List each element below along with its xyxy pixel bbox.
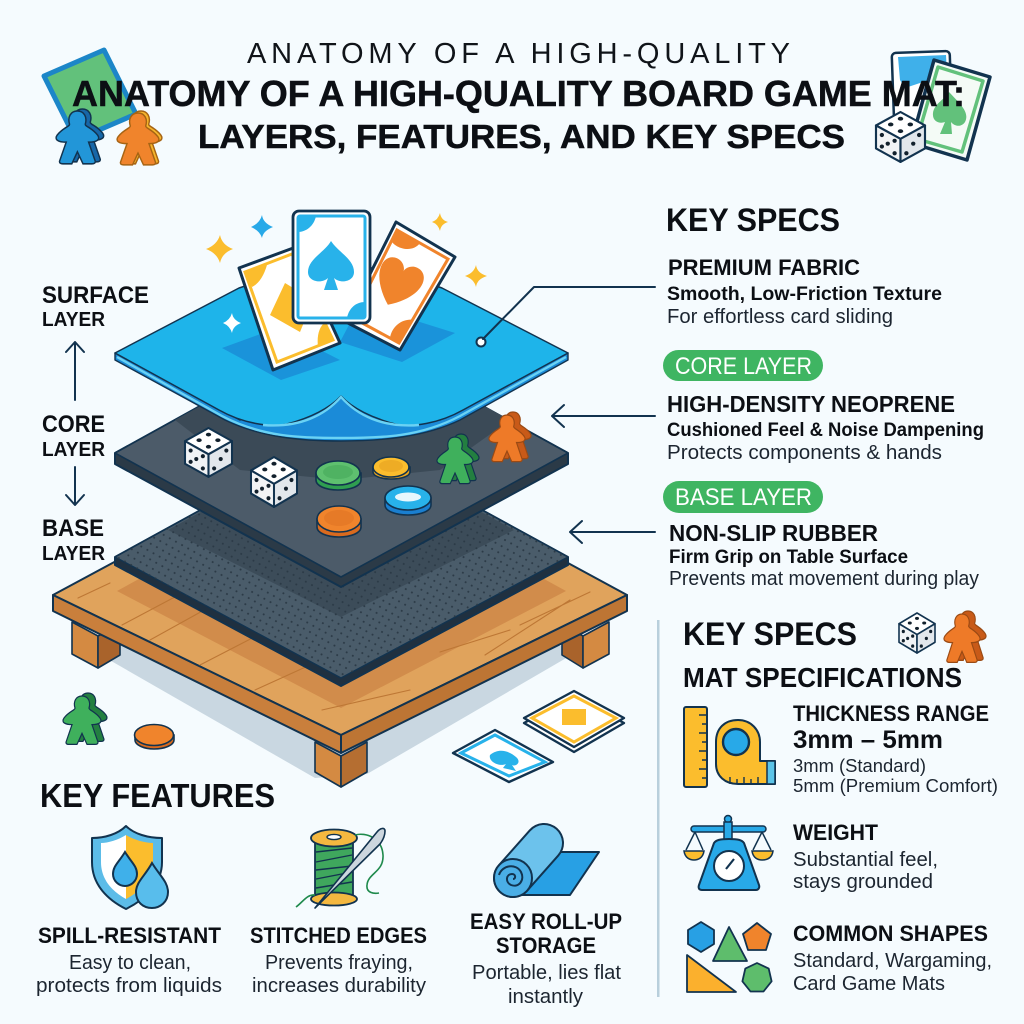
chip: orange — [134, 724, 174, 749]
layer: surface — [115, 268, 568, 441]
icon: dice 2 — [251, 457, 297, 507]
subheading: MAT SPECIFICATIONS — [683, 662, 962, 693]
pill: core layer: CORE LAYER — [675, 353, 812, 380]
base block: Prevents mat movement during play — [669, 568, 979, 590]
left layer labels: LAYER — [42, 543, 106, 565]
thickness text: THICKNESS RANGE — [793, 701, 989, 726]
icon: scale — [684, 816, 773, 890]
header icon: cards and dice — [876, 51, 990, 162]
heading: KEY SPECS — [666, 202, 840, 238]
icon: dice — [899, 613, 935, 653]
blue card — [293, 211, 370, 323]
core block: Protects components & hands — [667, 442, 942, 464]
roll-up text: EASY ROLL-UP — [470, 909, 622, 934]
icon: thread and needle — [296, 828, 385, 908]
card stack: yellow — [524, 691, 624, 752]
table shadow — [92, 600, 580, 778]
left layer labels: BASE — [42, 515, 104, 542]
shapes text: COMMON SHAPES — [793, 921, 988, 946]
roll-up text: instantly — [508, 986, 583, 1008]
title — [72, 38, 965, 155]
meeple: green — [437, 434, 479, 484]
roll-up text — [470, 909, 622, 1008]
meeple: green — [63, 693, 107, 744]
card shadows — [222, 328, 340, 380]
wood grain — [78, 583, 590, 710]
roll-up text: Portable, lies flat — [472, 962, 621, 984]
base block: Firm Grip on Table Surface — [669, 547, 908, 568]
weight text: stays grounded — [793, 871, 933, 893]
shapes text — [793, 921, 992, 995]
weight text: WEIGHT — [793, 820, 879, 845]
panel: mat specifications — [683, 611, 998, 995]
thickness text — [793, 701, 998, 796]
shapes text: Standard, Wargaming, — [793, 950, 992, 972]
pill: base layer: BASE LAYER — [675, 484, 812, 511]
icon: meeple — [944, 611, 986, 662]
arrow: down — [66, 467, 84, 505]
playing cards — [239, 211, 455, 370]
floor pieces — [63, 691, 624, 782]
surface block: Smooth, Low-Friction Texture — [667, 284, 942, 305]
left layer labels: SURFACE — [42, 282, 149, 309]
base block: NON-SLIP RUBBER — [669, 520, 878, 546]
yellow card — [239, 247, 340, 370]
chip: orange — [317, 506, 361, 537]
wooden table — [53, 440, 627, 787]
sparkles — [206, 213, 487, 333]
title: ANATOMY OF A HIGH-QUALITY — [247, 38, 790, 70]
weight text — [793, 820, 938, 893]
stitched edges text: increases durability — [252, 975, 426, 997]
thickness text: 5mm (Premium Comfort) — [793, 776, 998, 796]
stitched edges text: STITCHED EDGES — [250, 923, 427, 948]
mat top — [115, 268, 568, 425]
core block: Cushioned Feel & Noise Dampening — [667, 420, 984, 441]
table legs — [72, 622, 609, 787]
spill-resistant text: protects from liquids — [36, 975, 222, 997]
shapes text: Card Game Mats — [793, 973, 945, 995]
panel: key features — [36, 777, 622, 1008]
surface block: For effortless card sliding — [667, 306, 893, 328]
chip: green — [316, 461, 361, 490]
left layer labels: LAYER — [42, 309, 106, 331]
game pieces on core layer — [185, 412, 531, 537]
surface block — [667, 255, 942, 328]
thickness text: 3mm (Standard) — [793, 756, 926, 776]
title: ANATOMY OF A HIGH-QUALITY BOARD GAME MAT: — [72, 73, 965, 114]
spill-resistant text: SPILL-RESISTANT — [38, 923, 222, 948]
orange card — [346, 222, 455, 350]
icon: dice — [185, 428, 232, 477]
thickness text: 3mm – 5mm — [793, 726, 943, 754]
layer: base — [115, 433, 568, 686]
core block — [667, 391, 984, 464]
spill-resistant text: Easy to clean, — [69, 952, 191, 974]
table top — [53, 440, 627, 735]
mat underside — [115, 353, 568, 441]
spill-resistant text — [36, 923, 222, 997]
icon: shield — [92, 826, 168, 909]
stitched edges text — [250, 923, 427, 997]
divider — [657, 620, 660, 997]
chip: blue — [385, 486, 431, 515]
heading: KEY FEATURES — [40, 777, 275, 814]
icon: rolled mat — [494, 843, 599, 897]
stitched edges text: Prevents fraying, — [265, 952, 413, 974]
header icon: card and meeples — [44, 50, 162, 165]
card: blue — [453, 730, 553, 782]
panel: key specs layers — [663, 202, 984, 590]
base block — [669, 520, 979, 590]
meeple: orange — [489, 412, 531, 462]
left layer labels: CORE — [42, 411, 105, 438]
left layer labels: LAYER — [42, 439, 106, 461]
core block: HIGH-DENSITY NEOPRENE — [667, 391, 955, 417]
left layer labels — [42, 282, 149, 565]
surface block: PREMIUM FABRIC — [668, 255, 860, 280]
weight text: Substantial feel, — [793, 849, 938, 871]
layer: core — [115, 328, 568, 587]
arrow: up — [66, 342, 84, 400]
leader lines — [483, 287, 655, 543]
leader dot — [476, 338, 486, 346]
icon: shapes — [687, 922, 772, 992]
roll-up text: STORAGE — [496, 933, 596, 958]
heading: KEY SPECS — [683, 616, 857, 652]
chip: yellow — [373, 457, 410, 479]
title: LAYERS, FEATURES, AND KEY SPECS — [198, 118, 845, 155]
icon: ruler and tape — [684, 707, 775, 787]
